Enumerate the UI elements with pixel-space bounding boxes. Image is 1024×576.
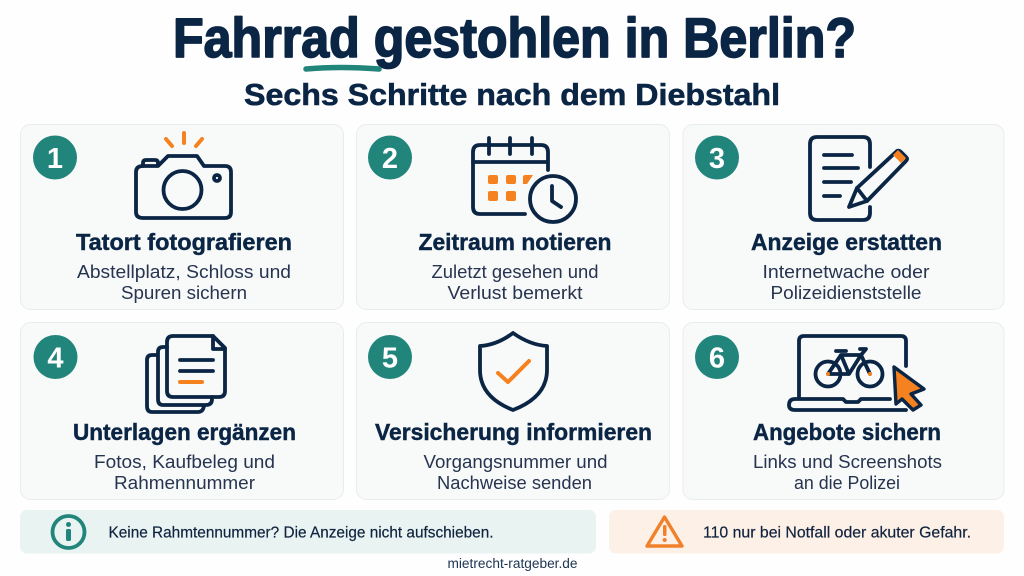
panel: step 5	[356, 322, 670, 500]
step 4 description	[94, 451, 275, 493]
warning text: 110 nur bei Notfall oder akuter Gefahr.	[703, 524, 971, 542]
step 1 description: Spuren sichern	[121, 282, 247, 303]
icon: info	[52, 516, 84, 548]
step 2 description	[432, 261, 598, 303]
icon: warning triangle	[647, 517, 682, 546]
number badge 1: 1	[47, 143, 63, 175]
panel: step 2	[356, 124, 670, 310]
hint text: Keine Rahmtennummer? Die Anzeige nicht aufschieben.	[108, 524, 494, 542]
step 3 heading: Anzeige erstatten	[751, 229, 942, 255]
step 5 description: Nachweise senden	[437, 472, 592, 493]
panel: step 3	[683, 124, 1004, 310]
number badge 6	[695, 335, 739, 379]
step 4 heading: Unterlagen ergänzen	[73, 419, 296, 445]
panel: step 1	[20, 124, 344, 310]
step 3 description: Polizeidienststelle	[770, 282, 922, 303]
icon: laptop with bicycle and cursor	[789, 336, 924, 410]
title underline accent	[306, 68, 379, 69]
number badge 5	[368, 335, 412, 379]
callout: emergency warning	[609, 510, 1004, 554]
step 6 description: an die Polizei	[794, 472, 900, 493]
icon: shield with check	[480, 333, 547, 410]
number badge 4: 4	[47, 342, 64, 374]
step 4 description: Rahmennummer	[114, 472, 255, 493]
step 6 heading: Angebote sichern	[753, 419, 941, 445]
callout: frame number hint	[20, 510, 596, 554]
step 4 description: Fotos, Kaufbeleg und	[94, 451, 275, 472]
icon: calendar with clock	[473, 138, 576, 222]
footer source: mietrecht-ratgeber.de	[448, 556, 578, 571]
step 3 description	[762, 261, 930, 303]
icon: document with pencil	[810, 137, 907, 220]
subtitle: Sechs Schritte nach dem Diebstahl	[244, 77, 780, 112]
step 2 description: Zuletzt gesehen und	[432, 261, 598, 282]
step 6 description: Links und Screenshots	[753, 451, 942, 472]
step 2 description: Verlust bemerkt	[448, 282, 582, 303]
number badge 1	[33, 136, 77, 180]
number badge 2	[368, 136, 412, 180]
number badge 6: 6	[709, 342, 725, 374]
icon: camera with flash	[136, 133, 231, 218]
number badge 5: 5	[382, 342, 398, 374]
number badge 3	[695, 136, 739, 180]
step 5 heading: Versicherung informieren	[375, 419, 652, 445]
step 3 description: Internetwache oder	[762, 261, 930, 282]
panel: step 4	[20, 322, 344, 500]
number badge 4	[34, 335, 78, 379]
step 1 heading: Tatort fotografieren	[76, 229, 292, 255]
number badge 3: 3	[709, 143, 725, 175]
icon: stacked documents	[147, 336, 225, 412]
step 5 description	[424, 451, 608, 493]
step 2 heading: Zeitraum notieren	[418, 229, 612, 255]
step 1 description: Abstellplatz, Schloss und	[77, 261, 291, 282]
panel: step 6	[683, 322, 1004, 500]
step 5 description: Vorgangsnummer und	[424, 451, 608, 472]
step 6 description	[753, 451, 942, 493]
title: Fahrrad gestohlen in Berlin?	[173, 6, 856, 69]
number badge 2: 2	[382, 143, 398, 175]
step 1 description	[77, 261, 291, 303]
